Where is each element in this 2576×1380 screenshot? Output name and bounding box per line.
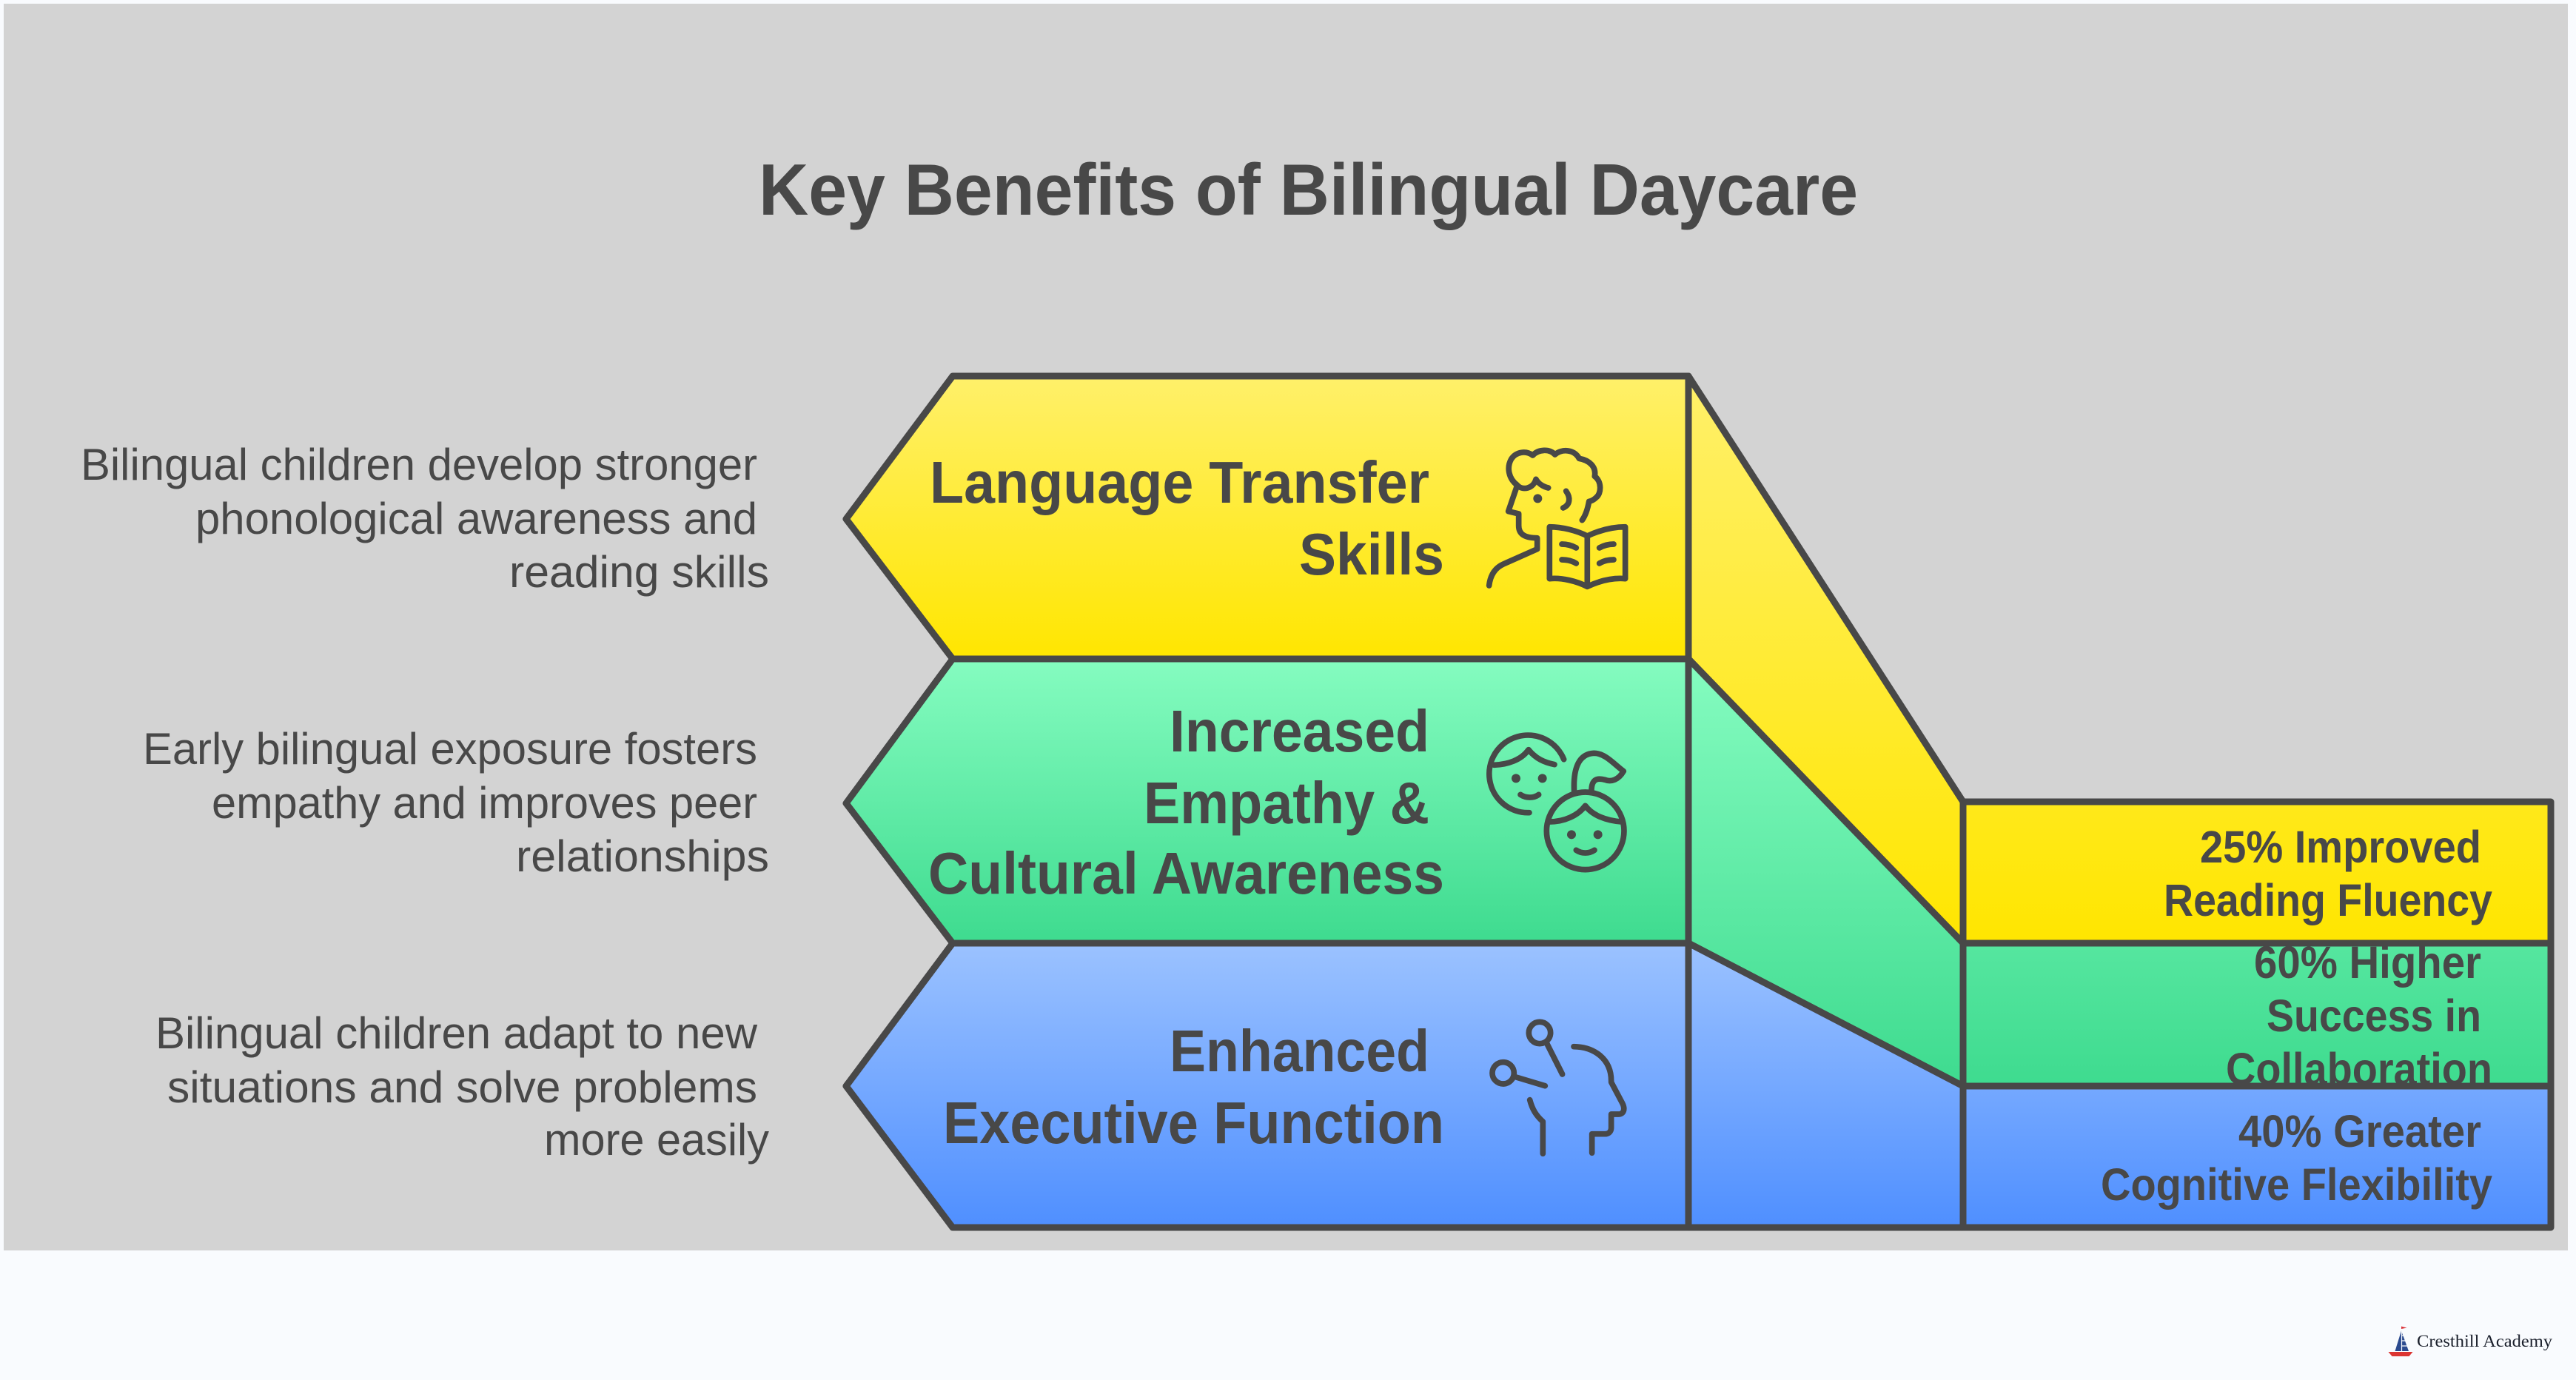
icon: sailboat	[2388, 1327, 2413, 1356]
stat box: reading fluency: 25% Improved	[2200, 822, 2481, 872]
heading: language transfer skills	[930, 449, 1444, 587]
arrow panel: enhanced executive function	[846, 943, 1688, 1227]
panel: empathy description: Early bilingual exposure fosters	[143, 724, 757, 774]
panel: empathy description	[143, 724, 769, 881]
stat box: collaboration: Success in	[2267, 991, 2481, 1041]
panel: executive function description: more easily	[544, 1115, 769, 1165]
stat box: collaboration: 60% Higher	[2254, 937, 2481, 988]
connector: green	[1688, 659, 1963, 1086]
logo: Cresthill Academy: Cresthill Academy	[2417, 1332, 2553, 1350]
heading: language transfer skills: Language Transfer	[930, 449, 1429, 515]
panel: executive function description	[155, 1008, 769, 1165]
icon: two children faces	[1489, 735, 1624, 870]
stat box: reading fluency: Reading Fluency	[2164, 875, 2492, 925]
stat box: cognitive flexibility: 40% Greater	[2238, 1106, 2481, 1156]
panel: empathy description: empathy and improves peer	[212, 778, 757, 828]
heading: enhanced executive function	[943, 1018, 1444, 1156]
panel: language transfer description: phonological awareness and	[195, 494, 757, 543]
panel: language transfer description: Bilingual children develop stronger	[81, 440, 757, 489]
panel: executive function description: situations and solve problems	[167, 1062, 757, 1112]
connector: blue	[1688, 943, 1963, 1227]
heading: language transfer skills: Skills	[1299, 521, 1444, 587]
panel: empathy description: relationships	[516, 831, 769, 881]
heading: increased empathy and cultural awareness	[928, 698, 1444, 906]
logo: Cresthill Academy	[2388, 1327, 2553, 1356]
heading: increased empathy and cultural awareness: Cultural Awareness	[928, 840, 1444, 906]
heading: enhanced executive function: Executive Function	[943, 1090, 1444, 1156]
panel: language transfer description	[81, 440, 769, 597]
heading: increased empathy and cultural awareness: Empathy &	[1144, 770, 1429, 836]
arrow panel: increased empathy	[846, 659, 1688, 943]
connector: yellow	[1688, 376, 1963, 943]
stat box: collaboration: Collaboration	[2226, 1044, 2492, 1094]
heading: enhanced executive function: Enhanced	[1170, 1018, 1429, 1084]
icon: head with nodes	[1492, 1022, 1624, 1153]
stat box: cognitive flexibility: Cognitive Flexibility	[2101, 1159, 2492, 1210]
panel: executive function description: Bilingual children adapt to new	[155, 1008, 758, 1058]
icon: person reading book	[1489, 450, 1626, 586]
title: Key Benefits of Bilingual Daycare	[759, 149, 1858, 230]
panel: language transfer description: reading skills	[509, 547, 769, 597]
stat box: reading fluency	[1963, 802, 2551, 943]
heading: increased empathy and cultural awareness: Increased	[1170, 698, 1429, 764]
stat box: cognitive flexibility	[1963, 1086, 2551, 1227]
stat box: collaboration	[1963, 937, 2551, 1094]
arrow panel: language transfer skills	[846, 376, 1688, 659]
